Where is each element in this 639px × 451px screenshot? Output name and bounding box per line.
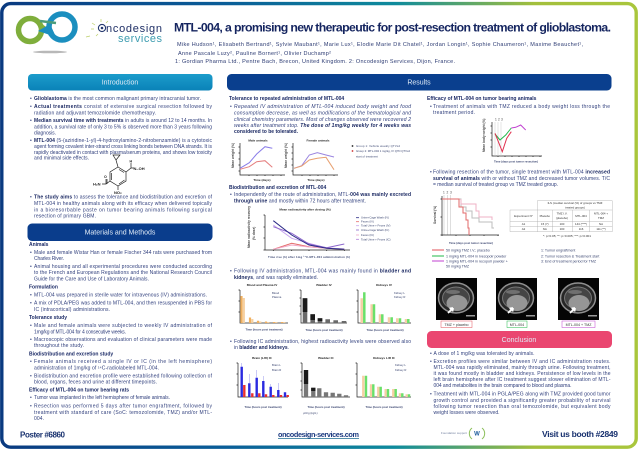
tolerance text: consumption decrease, as well as modifications of the hematological and (234, 110, 411, 116)
chart: survival: Survival (%) (433, 206, 437, 224)
formulation: • (30, 292, 32, 298)
survival text (430, 170, 610, 188)
introduction text: • (30, 96, 32, 102)
legend: survival: 1: Tumor engraftment (541, 248, 575, 252)
study aims: in a bioresorbable paste on tumor bearing animals following surgical (34, 208, 212, 214)
table: survival: ILS (median survival (%) of groups vs TMZ (548, 201, 603, 205)
chart: bladder IV: Time (hours post treatment) (305, 328, 343, 332)
tolerance text: weeks after treatment stop. The dose of 1mg/kg weekly for 4 weeks was (234, 123, 411, 129)
conclusion text: Treatment with MTL-004 in PGLA/PEG along with TMZ provided good tumor (434, 392, 611, 398)
chart: body weight during treatment: 2 (498, 118, 500, 122)
legend: excretion: Urine+Cage Wash (IV) (361, 216, 389, 220)
chart: female animals body weight: Female animals (306, 138, 330, 142)
chart: kidneys IC: Kidney R (395, 368, 406, 372)
chart: bladder IV (300, 283, 347, 332)
introduction text: addition, a survival rate of only 3 to 5% is observed more than 3 years following (34, 124, 212, 130)
conclusion header: Conclusion (502, 337, 536, 344)
introduction text: radiation and adjuvant temozolomide chemotherapy. (34, 110, 156, 116)
study aims: The study aims to assess the tolerance and biodistribution and excretion of (34, 194, 213, 200)
efficacy text: treatment period. (433, 110, 475, 116)
table: survival: MTL-004 + (594, 212, 608, 216)
tolerance text: Repeated IV administration of MTL-004 induced body weight and food (234, 104, 411, 110)
biodistribution and excretion study: administration of 1mg/kg of ¹⁴C-radiolabeled MTL-004. (34, 366, 159, 372)
chart: survival: 2 (446, 190, 448, 194)
efficacy text: • (430, 104, 432, 110)
biodistribution and excretion study: Biodistribution and excretion study (29, 352, 113, 358)
legend: survival: 1 mg/kg MTL-004 in Ivecopolr powder (446, 254, 507, 258)
chart: blood and plasma IV: Blood and Plasma IV (247, 283, 278, 287)
introduction text: rapidly deactivated in contact with plasma/serum proteins, and shows low toxicity (34, 150, 212, 156)
efficacy methods: • (30, 404, 32, 410)
table: survival: A1 (522, 222, 526, 226)
introduction header (28, 74, 212, 90)
biodistribution text: • (230, 192, 232, 198)
legend: excretion: Feces (IC) (361, 233, 374, 237)
chart: kidneys IC: Kidney L (395, 363, 406, 367)
icon: oncodesign logo: services (118, 33, 162, 45)
conclusion text: MTL-004 was rapidly eliminated, mainly through urine. Following treatment, (434, 365, 610, 371)
authors and affiliations (175, 42, 583, 65)
poster number: Poster #6860 (20, 430, 66, 440)
formulation: Formulation (29, 284, 58, 290)
chart: kidneys IV: Kidneys IV (376, 283, 393, 287)
chemical structure of MTL-004: H₂N (93, 182, 101, 186)
chart: female animals body weight (284, 138, 338, 182)
table: survival: MTL-004 (575, 214, 587, 218)
materials and methods header (28, 224, 212, 241)
formulation (29, 284, 212, 313)
survival text: survival of animals with or without TMZ and decreased tumor volumes. T/C (433, 176, 610, 182)
chart: kidneys IC: Time (hours post treatment) (365, 405, 403, 409)
chart: body weight during treatment: 1 (495, 118, 497, 122)
results header: Results (407, 80, 431, 86)
survival text: • (430, 170, 432, 176)
chart: blood and plasma IV: Time (hours post treatment) (245, 328, 283, 332)
introduction text: Glioblastoma is the most common malignant primary intracranial tumor. (34, 96, 201, 102)
animals: Charles River. (34, 256, 64, 262)
conclusion text (430, 351, 611, 416)
icon: oncodesign logo (18, 14, 162, 53)
sponsor logo (441, 428, 485, 439)
tolerance study (29, 315, 213, 349)
tolerance study: Macroscopic observations and evaluation of clinical parameters were made (34, 337, 212, 343)
biodistribution text (229, 185, 411, 204)
legend: excretion: Total Urine + Feces (IC) (361, 237, 391, 241)
efficacy text (427, 96, 610, 116)
conclusion text: it was found mostly in bladder and kidneys. Persistence of low levels in the (434, 371, 611, 377)
table: survival: TMZ I.V. (557, 212, 568, 216)
study aims (30, 194, 213, 220)
table: survival: treated groups) (565, 206, 585, 210)
legend: survival: 50 mg/kg TMZ (446, 264, 470, 268)
biodistribution text: through urine and mostly within 72 hours after treatment. (234, 198, 366, 204)
chart: mean radioactivity after dosing (247, 206, 350, 259)
tolerance text: considered to be tolerated. (234, 129, 299, 135)
introduction text: agent forming covalent inter-strand cross linking bonds between DNA strands. It is (34, 144, 212, 150)
chart: male animals body weight: Mean weight (%) (231, 143, 235, 168)
tolerance text (229, 96, 411, 135)
chemical structure of MTL-004: NO₂ (114, 190, 122, 195)
study aims: MTL-004 in healthy animals along with its efficacy when delivered topically (34, 201, 212, 207)
tolerance text: clinical chemistry parameters. Most of changes observed were recovered 2 (234, 117, 411, 123)
introduction text: Median survival time with treatments in adults is around 12 to 14 months. In (34, 118, 212, 124)
chart: blood and plasma IV: Blood (272, 291, 280, 295)
panel: introduction (28, 74, 213, 220)
chart: body weight during treatment: Time (days post tumor resection) (494, 160, 538, 164)
authors and affiliations: Mike Hudson¹, Elisabeth Bertrand¹, Sylvie Maubant¹, Marie Lux¹, Elodie Marie Dit Chatel¹, Jordan Longin¹, Sophie Chaumeron¹, Maxime Beauchet¹, (177, 42, 583, 48)
survival text: = median survival of treated group vs TMZ treated group. (433, 182, 558, 188)
chart: bladder IC: Time (hours post treatment) (307, 405, 345, 409)
MRI image: MTL-004: MTL-004 (510, 323, 524, 327)
booth number: Visit us booth #2849 (542, 429, 618, 439)
tolerance study: 1mg/kg of MTL-004 for 4 consecutive weeks. (34, 330, 126, 336)
chart: survival: 3 (450, 190, 452, 194)
introduction text: Actual treatments consist of extensive surgical resection followed by (34, 104, 212, 110)
animals: to the French and European Regulations and the National Research Council (34, 270, 212, 276)
animals: Animals (29, 242, 49, 248)
table: survival: Experiment N° (514, 214, 533, 218)
conclusion text: left brain hemisphere after IC treatment suggest slower elimination of MTL- (434, 377, 611, 383)
chart: kidneys IV: Kidney L (394, 291, 405, 295)
chart: male animals body weight: Male animals (248, 138, 268, 142)
chemical structure of MTL-004: N–OH (134, 166, 145, 171)
animals: Guide for the Care and Use of Laboratory Animals. (34, 276, 149, 282)
efficacy methods: Resection was performed 5 days after tumor engraftment, followed by (34, 404, 212, 410)
chart: brain IC: Brain (L/R) IC (252, 356, 273, 360)
chart: kidneys IV: Time (hours post treatment) (366, 328, 404, 332)
conclusion text: • (430, 351, 432, 357)
MRI image: TMZ + placebo (436, 278, 477, 328)
icon: oncodesign logo: ncodesign (106, 23, 162, 35)
biodistribution text: Independently of the route of administration, MTL-004 was mainly excreted (234, 192, 411, 198)
IV text: • (230, 269, 232, 275)
IC text (230, 339, 411, 351)
MRI image: MTL-004 (496, 278, 537, 328)
tolerance study: throughout the study. (34, 343, 84, 349)
IV text: Following IV administration, MTL-004 was mainly found in bladder and (234, 269, 411, 275)
chemical structure of MTL-004 (93, 155, 145, 195)
legend: survival: 1 mg/kg MTL-004 in recopolr powder + (446, 259, 508, 263)
chart: brain IC (236, 356, 288, 409)
conclusion text: Excretion profiles were similar between IV and IC administration routes. (434, 359, 610, 365)
sponsor logo: Foundation support (441, 431, 467, 435)
legend: tolerance groups: Group 2: MTL-004 1 mg/kg, IV Q7D QTVxd (356, 149, 410, 153)
biodistribution and excretion study: • (30, 359, 32, 365)
conclusion text: A dose of 1 mg/kg was tolerated by animals. (434, 351, 534, 357)
table: survival: 144 (****) (575, 222, 587, 226)
MRI image: MTL-004 + TMZ: MTL-004 + TMZ (566, 323, 592, 327)
biodistribution and excretion study: Female animals received a single IV or IC (in the left hemisphere) (34, 359, 212, 365)
chart: bladder IC (300, 356, 350, 409)
chart: brain IC: Time (hours post treatment) (244, 405, 282, 409)
table: survival: (placebo) (556, 216, 568, 220)
efficacy methods: treatment with standard of care (SoC: temozolomide, TMZ) and/or MTL- (34, 410, 212, 416)
animals: Male and female Wistar Han or female Fischer 344 rats were purchased from (34, 250, 212, 256)
chart: male animals body weight (231, 138, 285, 182)
formulation: IC (intracortical) administrations. (34, 307, 110, 313)
tolerance study: Tolerance study (29, 315, 67, 321)
IC text: • (230, 339, 232, 345)
chart: brain IC: Brain R (272, 368, 281, 372)
panel: materials and methods (28, 224, 213, 422)
study aims: • (30, 194, 32, 200)
unit note: μCi/g (kg/L) (303, 411, 318, 415)
survival text: Following resection of the tumor, single treatment with MTL-004 increased (433, 170, 610, 176)
tolerance study: • (30, 337, 32, 343)
IV text: kidneys, and was rapidly eliminated. (234, 275, 318, 281)
chart: brain IC: Brain L (272, 363, 281, 367)
conclusion text: 004 and metabolites in the brain compared to blood and plasma. (434, 383, 572, 389)
chart: body weight during treatment: 3 (501, 118, 503, 122)
efficacy methods: Tumor was implanted in the left hemisphere of female animals. (34, 395, 170, 401)
study aims: resection of primary GBM. (34, 214, 96, 220)
chart: blood and plasma IV: Plasma (272, 295, 282, 299)
MRI image: TMZ + placebo: TMZ + placebo (444, 323, 469, 327)
chart: blood and plasma IV (238, 283, 288, 332)
panel: results (227, 74, 612, 415)
formulation: MTL-004 was prepared in sterile water for intravenous (IV) administrations. (34, 292, 207, 298)
table: survival: A2 (522, 227, 526, 231)
legend: survival (432, 248, 599, 268)
table: survival: *: p<0.05; **: p<0.005; ***: p<0.001 (543, 234, 591, 238)
formulation: A mix of PDLA/PEG was added to MTL-004, and then resuspended in PBS for (34, 300, 212, 306)
biodistribution text: Biodistribution and excretion of MTL-004 (229, 185, 326, 191)
table: survival: 111 (**) (596, 227, 606, 231)
table: survival: TMZ (598, 216, 604, 220)
legend: survival: 50 mg/kg TMZ I.V.; placebo (446, 248, 490, 252)
chart: mean radioactivity after dosing: Mean radioactivity after dosing (%) (279, 208, 331, 212)
conclusion text: weight losses were observed. (434, 410, 500, 416)
chart: female animals body weight: Mean weight (%) (284, 143, 288, 168)
conclusion header (427, 331, 612, 348)
introduction header: Introduction (102, 80, 138, 86)
chemical structure of MTL-004: O (104, 175, 107, 179)
chart: body weight during treatment: Mean body weight (%) (482, 119, 486, 152)
chemical structure of MTL-004: H (130, 160, 132, 164)
table: survival: 15 (7) (541, 222, 549, 226)
chart: female animals body weight: Time (days) (307, 178, 325, 182)
website link: oncodesign-services.com (278, 430, 360, 439)
animals: Animal housing and all experimental procedures were conducted according (34, 264, 212, 270)
chart: kidneys IC: Kidneys L/R IC (373, 356, 396, 360)
table: survival: 100 (560, 227, 565, 231)
results header (227, 74, 612, 90)
animals: • (30, 250, 32, 256)
conclusion text: following tumor resection than oral temozolomide, but equivalent body (434, 404, 611, 410)
efficacy methods: • (30, 395, 32, 401)
chart: survival: Time (days post tumor resection) (449, 241, 493, 245)
chart: mean radioactivity after dosing: (% dose) (252, 227, 256, 240)
panel: conclusion (427, 331, 612, 416)
conclusion text: growth control and provided a significantly greater probability of survival (434, 398, 610, 404)
biodistribution and excretion study: • (30, 374, 32, 380)
conclusion text: • (430, 392, 432, 398)
legend: excretion: Feces (IV) (361, 220, 374, 224)
title: MTL-004, a promising new therapeutic for post-resection treatment of glioblastoma. (174, 20, 611, 34)
efficacy text: Treatment of animals with TMZ reduced a body weight loss through the (433, 104, 610, 110)
chart: mean radioactivity after dosing: Mean radioactivity recovery (247, 206, 251, 248)
tolerance study: Male and female animals were subjected to weekly IV administration of (34, 323, 213, 329)
introduction text (30, 96, 212, 162)
introduction text: diagnosis. (34, 130, 56, 136)
legend: survival: 3: End of treatment period for TMZ (541, 259, 597, 263)
introduction text: and minimal side effects. (34, 156, 89, 162)
authors and affiliations: 1: Gordian Pharma Ltd., Pentre Bach, Brecon, United Kingdom. 2: Oncodesign Services, Dijon, France. (175, 59, 455, 65)
efficacy methods: 004. (34, 416, 44, 422)
chart: kidneys IC (356, 356, 411, 409)
MRI image: MTL-004 + TMZ (558, 278, 599, 328)
table: survival: NA (599, 222, 603, 226)
table: survival: 116 (579, 227, 584, 231)
tolerance text: • (230, 104, 232, 110)
biodistribution and excretion study: blood, organs, feces and urine at different timepoints. (34, 380, 157, 386)
IC text: Following IC administration, highest radioactivity levels were observed also (234, 339, 411, 345)
legend: tolerance groups (352, 144, 410, 158)
chart: survival (433, 190, 499, 245)
legend: survival: 2: Tumor resection & Treatment start (541, 254, 599, 258)
conclusion text: • (430, 359, 432, 365)
legend: tolerance groups: Group 1: Vehicle weekly QTVxd (356, 144, 400, 148)
tolerance study: • (30, 323, 32, 329)
chart: bladder IV: Bladder IV (316, 283, 333, 287)
chart: bladder IC: Bladder IC (318, 356, 334, 360)
authors and affiliations: Anne Pascale Luzy², Pauline Bornert¹, Olivier Duchamp² (178, 51, 331, 57)
IV text (230, 269, 411, 281)
introduction text: • (30, 138, 32, 144)
biodistribution and excretion study (29, 352, 213, 386)
formulation: • (30, 300, 32, 306)
animals (29, 242, 212, 282)
chart: kidneys IV (356, 283, 411, 332)
biodistribution and excretion study: Biodistribution and excretion profile were established following collection of (34, 374, 213, 380)
introduction text: MTL-004 (5-(aziridine-1-yl)-4-hydroxylamino-2-nitrobenzamide) is a cytotoxic (34, 138, 212, 144)
chart: mean radioactivity after dosing: Time rise (h) after 1mg ¹⁴C-MTL-004 administration (h) (268, 255, 350, 259)
table: survival: NA (543, 227, 547, 231)
table: survival: 100 (560, 222, 565, 226)
efficacy methods (29, 388, 212, 422)
chart: kidneys IV: Kidney R (394, 295, 405, 299)
chart: survival: 1 (443, 190, 445, 194)
legend: excretion (356, 216, 391, 241)
table: survival (510, 201, 612, 238)
chart: body weight during treatment (482, 118, 542, 164)
IC text: in bladder and kidneys. (234, 345, 289, 351)
animals: • (30, 264, 32, 270)
legend: excretion: Urine+Cage Wash (IC) (361, 228, 389, 232)
legend: tolerance groups: start of treatment (356, 154, 378, 158)
efficacy methods: Efficacy of MTL-004 on tumor bearing rats (29, 388, 129, 394)
introduction text: • (30, 118, 32, 124)
efficacy text: Efficacy of MTL-004 on tumor bearing animals (427, 96, 537, 102)
materials and methods header: Materials and Methods (85, 230, 156, 236)
table: survival: Placebo (540, 214, 550, 218)
sponsor logo: W (474, 432, 480, 438)
legend: excretion: Total Urine + Feces (IV) (361, 224, 391, 228)
tolerance text: Tolerance to repeated administration of MTL-004 (229, 96, 344, 102)
chart: male animals body weight: Time (days) (253, 178, 271, 182)
introduction text: • (30, 104, 32, 110)
